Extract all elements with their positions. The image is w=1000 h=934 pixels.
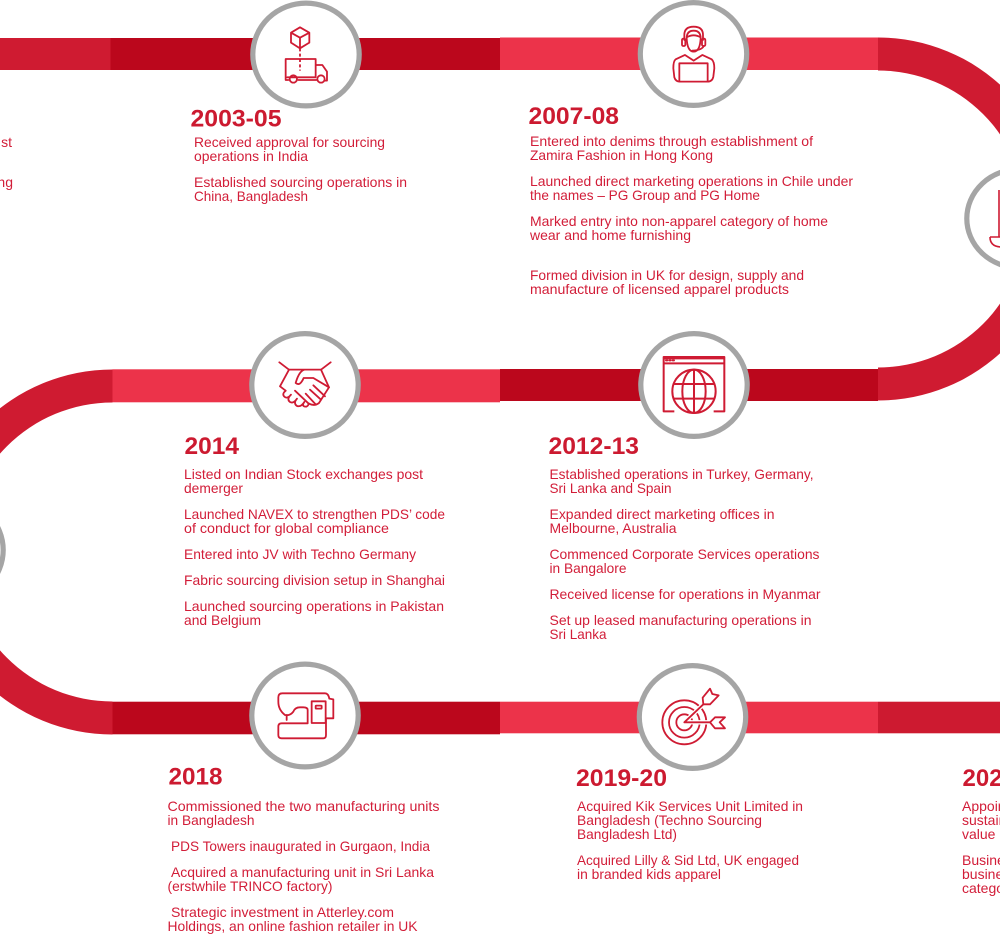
text block: 2019-20 milestones: Bangladesh Ltd)	[577, 826, 677, 842]
text block: 2018 milestones: Commissioned the two manufacturing units	[168, 798, 440, 814]
text block: 2018 milestones: Strategic investment in Atterley.com	[171, 904, 394, 920]
text block: 2019-20 milestones: in branded kids apparel	[577, 866, 721, 882]
text block: 2014 milestones: Fabric sourcing division setup in Shanghai	[184, 572, 445, 588]
text block: 2012-13 milestones: Sri Lanka	[550, 626, 607, 642]
milestone icon: partially visible right circle	[967, 169, 1000, 268]
text block: 2012-13 milestones: Melbourne, Australia	[550, 520, 677, 536]
text block: 2007-08 milestones: the names – PG Group and PG Home	[530, 187, 760, 203]
timeline road: middle segment	[112, 369, 878, 402]
text block: 2014 milestones: demerger	[184, 480, 243, 496]
heading: 2003-05: 2003-05	[190, 106, 282, 132]
text block: 2019-20 milestones	[577, 798, 803, 882]
text block: 2018 milestones: Acquired a manufacturing unit in Sri Lanka	[171, 864, 434, 880]
milestone icon: target with arrows	[639, 666, 746, 768]
text block: 2003-05 milestones: Established sourcing operations in	[194, 174, 407, 190]
text block: 2014 milestones: Launched NAVEX to strengthen PDS’ code	[184, 506, 445, 522]
timeline road: left curve	[0, 370, 113, 734]
text block: 2003-05 milestones: operations in India	[194, 148, 308, 164]
milestone icon: headset operator	[640, 3, 747, 105]
timeline road: right curve	[878, 38, 1000, 400]
text fragment: clipped left column: st	[1, 134, 12, 150]
text block: 2007-08 milestones: Marked entry into non-apparel category of home	[530, 213, 828, 229]
heading: 2019-20: 2019-20	[576, 765, 667, 792]
text block: 2003-05 milestones: China, Bangladesh	[194, 188, 308, 204]
text block: 2012-13 milestones: in Bangalore	[550, 560, 627, 576]
text block: 2007-08 milestones: Zamira Fashion in Hong Kong	[530, 147, 713, 163]
text block: 2014 milestones: Listed on Indian Stock exchanges post	[184, 466, 423, 482]
milestone icon: partially visible left circle	[0, 499, 3, 601]
text block: 2007-08 milestones	[529, 133, 853, 297]
text block: 2012-13 milestones: Received license for operations in Myanmar	[550, 586, 821, 602]
text block: 2019-20 milestones: Acquired Lilly & Sid Ltd, UK engaged	[577, 852, 799, 868]
text block: 2007-08 milestones: wear and home furnishing	[529, 227, 691, 243]
text block: 2018 milestones: Holdings, an online fashion retailer in UK	[168, 918, 418, 934]
text block: 2014 milestones: and Belgium	[184, 612, 261, 628]
heading: 2014: 2014	[184, 433, 240, 460]
text block: 2012-13 milestones: Sri Lanka and Spain	[550, 480, 672, 496]
heading: 2007-08: 2007-08	[528, 103, 619, 130]
text block: 2018 milestones: PDS Towers inaugurated in Gurgaon, India	[171, 838, 430, 854]
timeline road: bottom segment	[112, 702, 1000, 734]
text block: 2019-20 milestones: Bangladesh (Techno Sourcing	[577, 812, 762, 828]
text block: 2018 milestones: (erstwhile TRINCO factory)	[168, 878, 332, 894]
text block: 2012-13 milestones: Commenced Corporate Services operations	[550, 546, 820, 562]
text block: 2018 milestones: in Bangladesh	[168, 812, 254, 828]
text block: 2012-13 milestones: Established operations in Turkey, Germany,	[550, 466, 814, 482]
text block: 2007-08 milestones: manufacture of licensed apparel products	[530, 281, 789, 297]
text block: 2014 milestones: Entered into JV with Techno Germany	[184, 546, 416, 562]
text block: 2007-08 milestones: Formed division in UK for design, supply and	[530, 267, 804, 283]
milestone icon: web browser and globe	[641, 334, 747, 436]
text block: 2018 milestones	[168, 798, 440, 934]
text fragment: clipped left column	[0, 134, 13, 190]
text block: 2014 milestones	[184, 466, 445, 628]
text block: 2007-08 milestones: Launched direct marketing operations in Chile under	[530, 173, 853, 189]
text block: 2003-05 milestones	[194, 134, 407, 204]
text block: 2012-13 milestones: Set up leased manufacturing operations in	[550, 612, 812, 628]
text block: 2019-20 milestones: Acquired Kik Services Unit Limited in	[577, 798, 803, 814]
text block: 2012-13 milestones	[550, 466, 821, 642]
text block: 2014 milestones: Launched sourcing operations in Pakistan	[184, 598, 444, 614]
timeline road: top segment	[0, 38, 878, 70]
heading: 2012-13: 2012-13	[548, 433, 639, 460]
text block: 2007-08 milestones: Entered into denims through establishment of	[530, 133, 813, 149]
milestone icon: truck and parcel	[253, 3, 359, 106]
heading: 2018: 2018	[168, 764, 222, 790]
text block: 2003-05 milestones: Received approval for sourcing	[194, 134, 385, 150]
milestone icon: sewing machine	[252, 664, 358, 767]
milestone icon: handshake	[252, 334, 358, 436]
text block: 2014 milestones: of conduct for global compliance	[184, 520, 389, 536]
text block: 2012-13 milestones: Expanded direct marketing offices in	[550, 506, 774, 522]
text block: clipped next period milestones	[962, 798, 1000, 896]
